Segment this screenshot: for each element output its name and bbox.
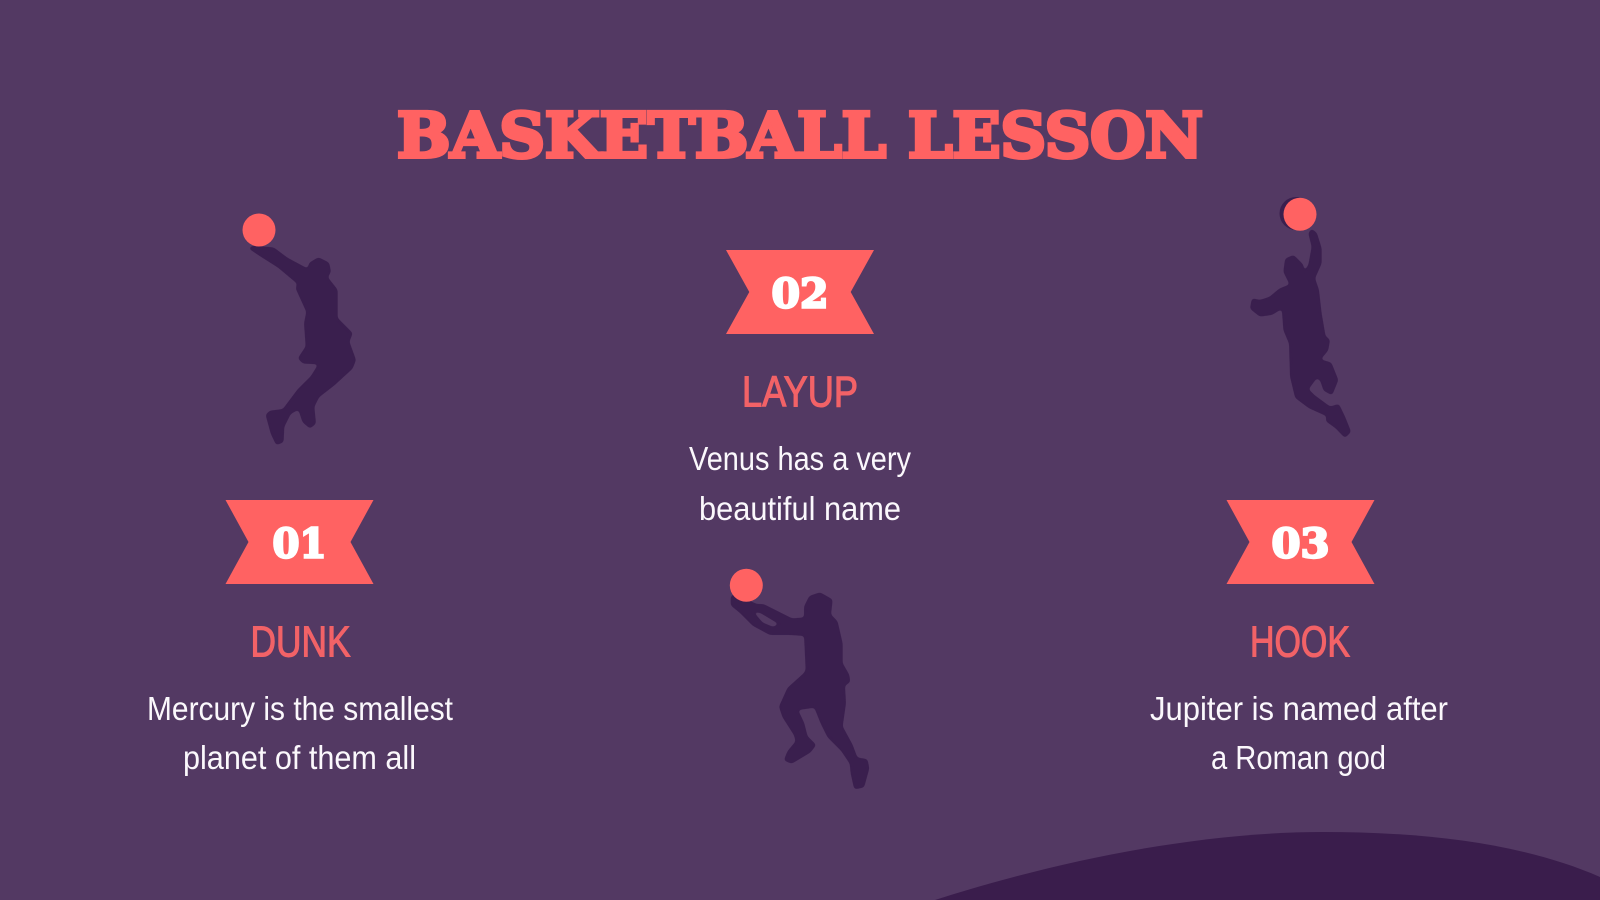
badge 02: [726, 250, 874, 334]
icon: player laying up with ball: [730, 569, 868, 788]
text: hook description: [1150, 690, 1448, 776]
badge 01: [226, 500, 374, 584]
icon: player dunking with ball: [242, 214, 355, 444]
text: layup description: [689, 440, 911, 527]
title: BASKETBALL LESSON: [397, 99, 1203, 172]
heading: dunk: DUNK: [250, 618, 350, 666]
text: dunk description: Mercury is the smallest: [147, 690, 453, 727]
badge 03: 03: [1272, 520, 1330, 568]
text: layup description: beautiful name: [699, 490, 901, 527]
text: hook description: Jupiter is named after: [1150, 690, 1448, 727]
heading: hook: HOOK: [1250, 618, 1350, 666]
panel: hook: [1150, 197, 1448, 776]
text: dunk description: [147, 690, 453, 776]
badge 01: 01: [272, 520, 326, 568]
panel: layup: [689, 250, 911, 788]
text: dunk description: planet of them all: [183, 739, 416, 776]
icon: player hooking with ball: [1251, 197, 1350, 437]
heading: layup: LAYUP: [742, 368, 858, 416]
text: layup description: Venus has a very: [689, 440, 911, 477]
hill: [935, 832, 1600, 900]
badge 03: [1226, 500, 1374, 584]
panel: dunk: [147, 214, 453, 776]
text: hook description: a Roman god: [1211, 739, 1386, 776]
badge 02: 02: [772, 270, 828, 318]
